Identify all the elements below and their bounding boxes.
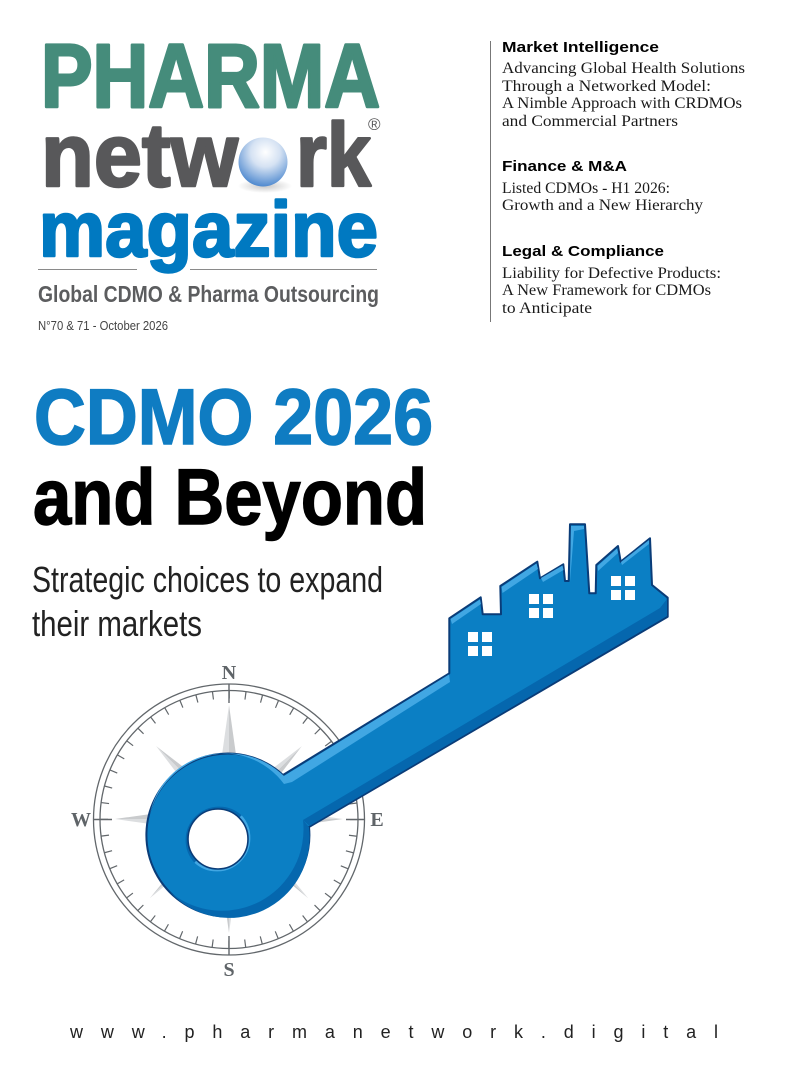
section: Legal and Compliance: Legal & Compliance — [502, 243, 664, 260]
compass letters: N — [222, 662, 237, 684]
section: Legal and Compliance: to Anticipate — [502, 300, 592, 317]
compass letters: W — [71, 809, 91, 831]
section: Market Intelligence: A Nimble Approach with CRDMOs — [502, 95, 742, 112]
wordmark network — [41, 106, 372, 206]
section: Finance and M&A: Growth and a New Hierarchy — [502, 197, 703, 214]
compass rose — [115, 705, 343, 933]
section: Market Intelligence — [502, 39, 745, 130]
subtitle — [32, 559, 383, 644]
issue line: N°70 & 71 - October 2026 — [38, 318, 168, 333]
headline line 1: CDMO 2026 — [34, 372, 433, 461]
section: Market Intelligence: Through a Networked Model: — [502, 78, 711, 95]
compass letters — [71, 662, 384, 981]
factory windows — [468, 576, 635, 656]
section: Finance and M&A: Listed CDMOs - H1 2026: — [502, 180, 670, 197]
contents column — [502, 39, 745, 317]
main headline — [33, 372, 433, 541]
website footer: www.pharmanetwork.digital — [69, 1022, 718, 1042]
compass — [71, 662, 384, 981]
wordmark PHARMA: PHARMA — [41, 27, 380, 127]
headline line 2: and Beyond — [33, 452, 427, 541]
key hole rim — [187, 808, 249, 870]
magazine tagline: Global CDMO & Pharma Outsourcing — [38, 281, 379, 307]
wordmark network: rk — [296, 106, 372, 206]
section: Legal and Compliance — [502, 243, 721, 317]
section: Market Intelligence: Market Intelligence — [502, 39, 659, 56]
section: Finance and M&A: Finance & M&A — [502, 158, 627, 175]
key head lower shade — [170, 820, 310, 918]
key shaft underside shade — [303, 599, 667, 826]
key top highlights — [150, 526, 649, 814]
compass letters: S — [223, 959, 235, 981]
registered mark: ® — [368, 115, 381, 134]
section: Legal and Compliance: A New Framework for CDMOs — [502, 282, 711, 299]
section: Market Intelligence: Advancing Global Health Solutions — [502, 60, 745, 77]
section: Market Intelligence: and Commercial Partners — [502, 113, 678, 130]
key with factory bit — [146, 524, 668, 918]
section: Legal and Compliance: Liability for Defective Products: — [502, 265, 721, 282]
section: Finance and M&A — [502, 158, 703, 214]
compass letters: E — [370, 809, 384, 831]
wordmark network: netw — [41, 106, 239, 206]
subtitle: their markets — [32, 603, 202, 644]
subtitle: Strategic choices to expand — [32, 559, 383, 600]
masthead logo — [38, 27, 381, 333]
wordmark magazine: magazine — [39, 185, 378, 273]
compass rings and ticks — [93, 684, 365, 955]
key body — [146, 524, 668, 917]
icon: blue sphere — [238, 138, 292, 193]
